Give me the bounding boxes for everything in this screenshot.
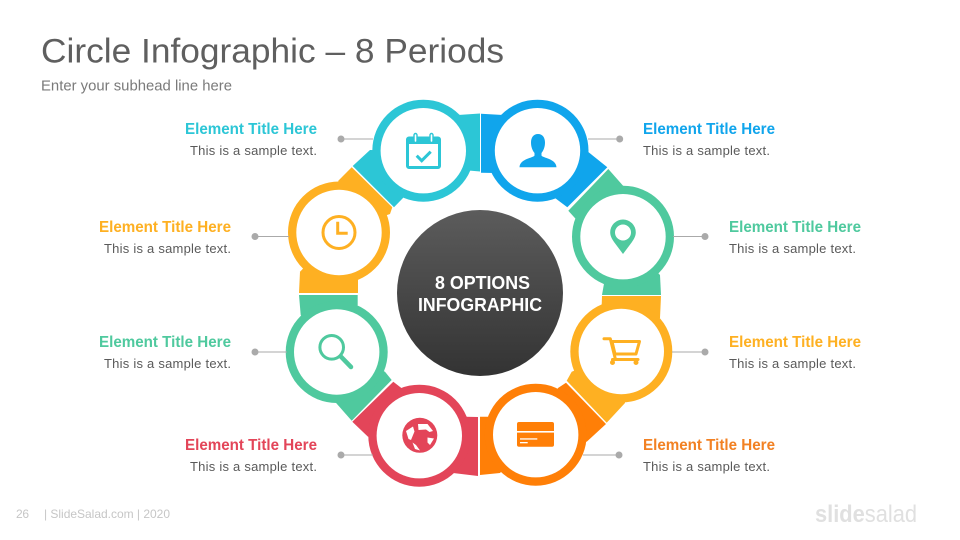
icon: map pin [610,220,636,254]
label: top left teal: This is a sample text. [190,143,317,158]
label: left yellow: Element Title Here [99,219,231,236]
segment: yellow cart [567,296,672,423]
icon: globe [402,418,437,453]
label: bottom left red: This is a sample text. [190,459,317,474]
icon: person [520,134,556,167]
label: bottom left red [185,437,373,474]
icon: credit card [517,422,554,447]
segment: teal calendar [353,100,480,207]
footer: page number: 26 [16,507,29,521]
label: top left teal [185,121,373,158]
segment: green search [286,295,392,421]
footer: credit: | SlideSalad.com | 2020 [44,507,170,521]
segment: blue person [481,100,607,207]
label: left green: Element Title Here [99,334,231,351]
segment: green pin [568,169,674,295]
label: bottom right orange [583,437,775,474]
label: bottom right orange: Element Title Here [643,437,775,454]
icon: magnifier [320,336,351,367]
title: Circle Infographic – 8 Periods [41,32,504,70]
segment: yellow clock [288,167,392,293]
label: bottom right orange: This is a sample text. [643,459,770,474]
label: top left teal: Element Title Here [185,121,317,138]
label: right green [673,219,861,256]
label: right yellow: This is a sample text. [729,356,856,371]
logo: slidesalad: slidesalad [815,501,917,528]
icon: calendar [408,134,440,168]
label: left green: This is a sample text. [104,356,231,371]
center circle [397,210,563,376]
label: top right blue: Element Title Here [643,121,775,138]
label: bottom left red: Element Title Here [185,437,317,454]
label: left yellow: This is a sample text. [104,241,231,256]
icon: clock [323,216,355,248]
segment: orange card [480,383,606,486]
label: left green [99,334,287,371]
label: right yellow [672,334,861,371]
label: left yellow [99,219,289,256]
label: top right blue [588,121,775,158]
label: right green: This is a sample text. [729,241,856,256]
icon: shopping cart [604,339,640,364]
center circle: INFOGRAPHIC [418,294,542,315]
label: top right blue: This is a sample text. [643,143,770,158]
center circle: 8 OPTIONS [435,272,530,293]
segment: red globe [352,382,478,487]
label: right green: Element Title Here [729,219,861,236]
label: right yellow: Element Title Here [729,334,861,351]
subhead: Enter your subhead line here [41,79,232,95]
